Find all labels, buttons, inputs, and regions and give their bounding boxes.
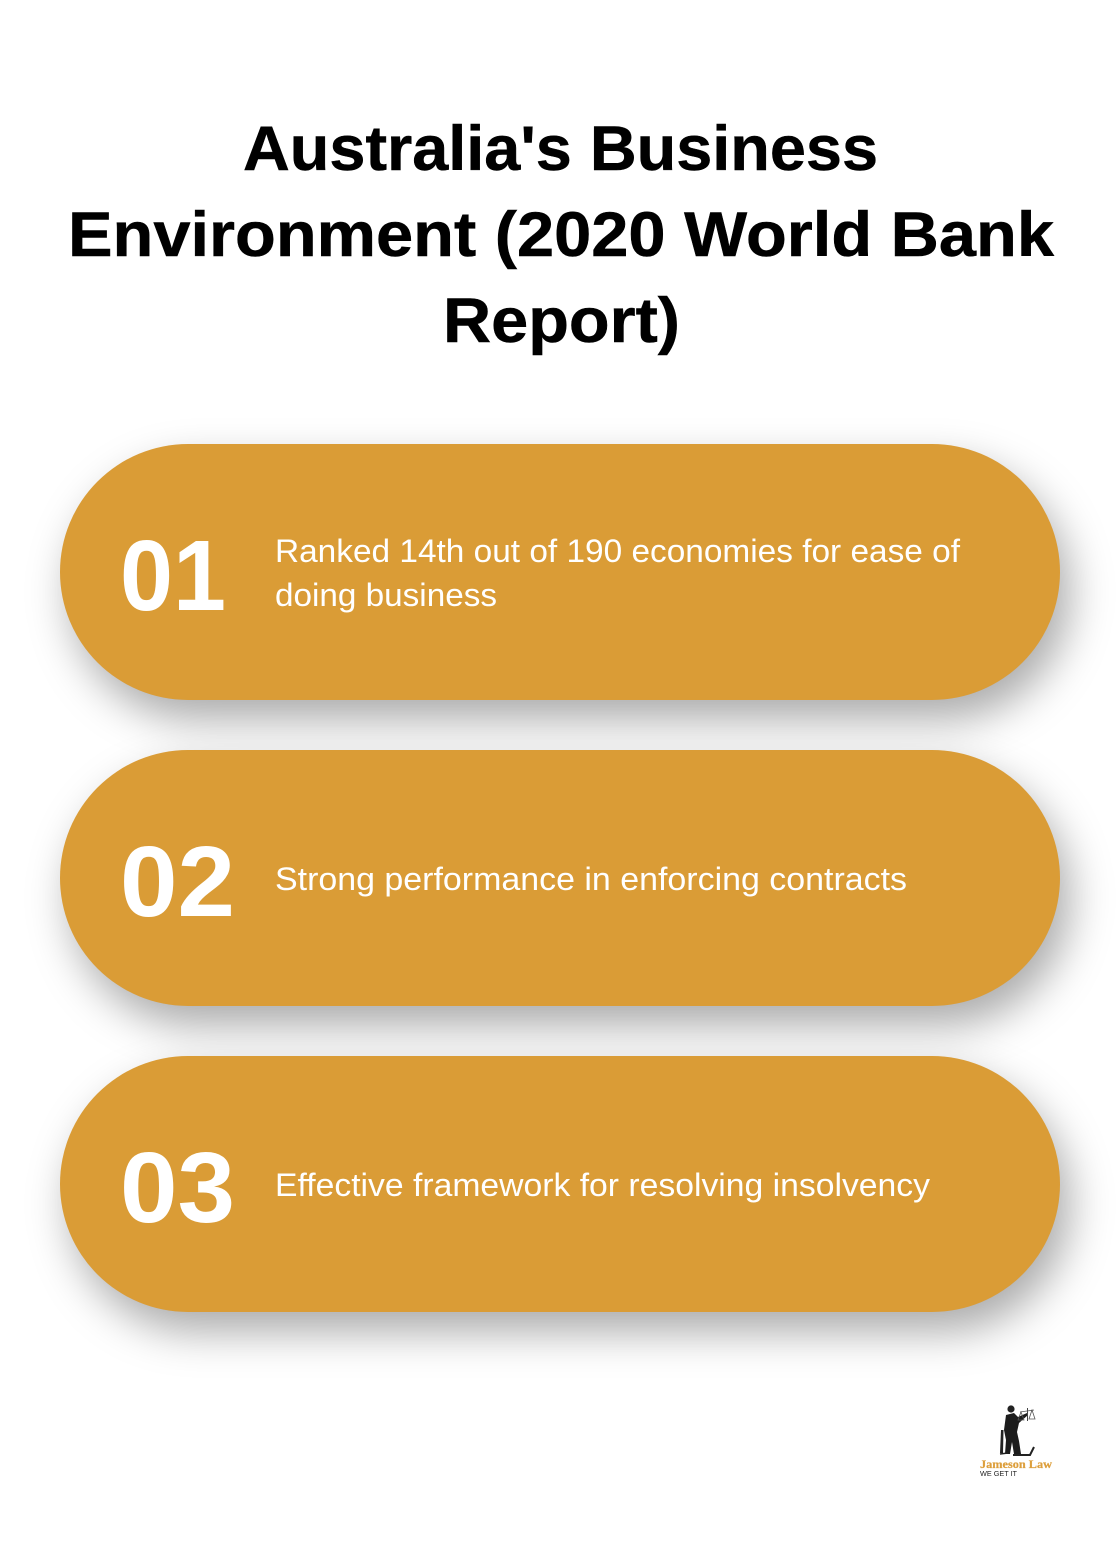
text: item 01 (275, 533, 961, 613)
text: item 03: Effective framework for resolving insolvency (275, 1167, 931, 1203)
number 03: 03 (120, 1132, 235, 1244)
title (68, 114, 1055, 356)
text: item 01: Ranked 14th out of 190 economies for ease of (275, 533, 961, 569)
icon: lady justice (1000, 1405, 1035, 1455)
logo: Jameson Law (980, 1405, 1053, 1478)
title: Report) (443, 286, 680, 356)
title: Environment (2020 World Bank (68, 200, 1055, 270)
text: item 02: Strong performance in enforcing contracts (275, 861, 907, 897)
title: Australia's Business (243, 114, 878, 184)
number 01: 01 (120, 520, 226, 632)
logo name: Jameson Law (980, 1459, 1053, 1471)
number 02: 02 (120, 826, 235, 938)
text: item 01: doing business (275, 577, 497, 613)
panel: item 01 (60, 444, 1070, 720)
panel: item 03 (60, 1056, 1070, 1332)
logo tagline: WE GET IT (980, 1469, 1017, 1478)
panel: item 02 (60, 750, 1070, 1026)
